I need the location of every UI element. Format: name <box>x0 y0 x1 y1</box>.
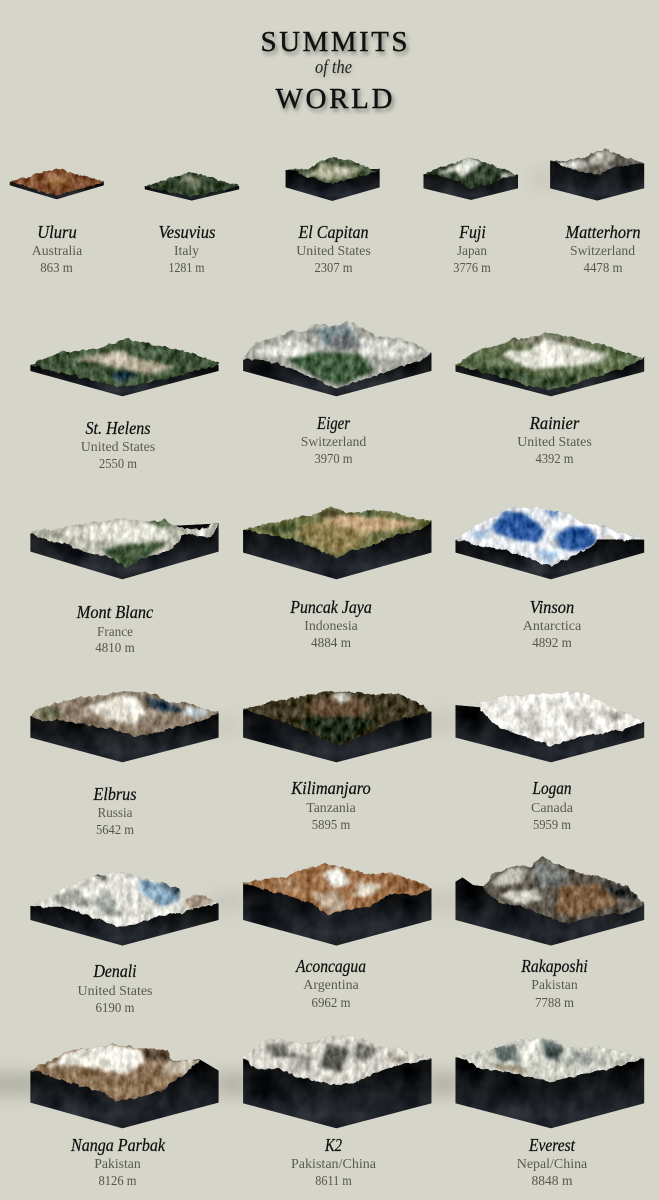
title line: of the: of the <box>315 57 352 78</box>
country: Russia <box>98 805 132 820</box>
height: 1281 m <box>168 260 205 275</box>
mountain: Vesuvius <box>145 172 239 275</box>
name: St. Helens <box>86 418 150 438</box>
terrain block <box>455 507 644 579</box>
height: 8126 m <box>98 1173 137 1188</box>
name: K2 <box>324 1135 342 1155</box>
country: United States <box>81 439 155 454</box>
terrain block <box>145 172 239 201</box>
name: Denali <box>93 961 136 981</box>
terrain block <box>30 338 219 396</box>
mountain: Denali <box>30 873 219 1015</box>
country: Tanzania <box>306 800 356 815</box>
terrain block <box>243 692 431 762</box>
height: 5642 m <box>96 822 134 837</box>
terrain block <box>243 864 431 946</box>
mountain: Vinson <box>455 507 644 650</box>
cast shadows <box>0 173 556 1094</box>
country: Australia <box>32 243 82 258</box>
height: 5895 m <box>312 817 351 832</box>
country: United States <box>517 434 592 449</box>
terrain block <box>10 168 104 199</box>
height: 8611 m <box>315 1173 352 1188</box>
height: 3970 m <box>314 451 353 466</box>
country: Italy <box>174 243 199 258</box>
country: Pakistan <box>94 1156 141 1171</box>
name: Fuji <box>458 222 486 242</box>
height: 4892 m <box>532 635 572 650</box>
country: Pakistan <box>531 977 578 992</box>
terrain block <box>243 507 431 579</box>
height: 7788 m <box>535 995 574 1010</box>
country: Japan <box>457 243 487 258</box>
country: Canada <box>531 800 573 815</box>
terrain block <box>30 692 219 762</box>
name: Aconcagua <box>295 956 366 976</box>
name: Matterhorn <box>565 222 640 242</box>
mountain: K2 <box>243 1037 431 1188</box>
height: 5959 m <box>533 817 571 832</box>
country: France <box>97 624 133 639</box>
terrain block <box>30 1044 219 1128</box>
country: Nepal/China <box>517 1156 587 1171</box>
mountain: Matterhorn <box>550 149 644 275</box>
title line: WORLD: WORLD <box>276 83 392 115</box>
country: Pakistan/China <box>291 1156 376 1171</box>
mountain: Elbrus <box>30 692 219 837</box>
country: Indonesia <box>304 618 358 633</box>
name: Puncak Jaya <box>289 597 372 617</box>
name: Vesuvius <box>158 222 216 242</box>
country: Switzerland <box>301 434 367 449</box>
height: 863 m <box>40 260 73 275</box>
mountain: Fuji <box>423 158 518 275</box>
terrain block <box>455 1038 644 1128</box>
terrain block <box>455 333 644 396</box>
height: 4478 m <box>584 260 623 275</box>
name: El Capitan <box>298 222 368 242</box>
terrain block <box>243 322 431 396</box>
name: Mont Blanc <box>76 602 153 622</box>
height: 6190 m <box>96 1000 135 1015</box>
terrain block <box>455 857 644 946</box>
terrain block <box>550 149 644 201</box>
title <box>260 26 408 115</box>
mountain: Everest <box>455 1038 644 1188</box>
name: Nanga Parbak <box>70 1135 166 1155</box>
name: Rainier <box>529 413 580 433</box>
mountain: Eiger <box>243 322 431 466</box>
country: Argentina <box>303 977 359 992</box>
terrain block <box>455 692 644 762</box>
mountain: Uluru <box>10 168 104 275</box>
mountain: Rainier <box>455 333 644 466</box>
mountain: Aconcagua <box>243 864 431 1010</box>
height: 3776 m <box>453 260 491 275</box>
name: Logan <box>532 778 572 798</box>
height: 6962 m <box>312 995 351 1010</box>
title line: SUMMITS: SUMMITS <box>260 26 408 58</box>
name: Kilimanjaro <box>290 778 371 798</box>
name: Everest <box>528 1135 576 1155</box>
country: United States <box>78 983 152 998</box>
name: Elbrus <box>93 784 136 804</box>
terrain block <box>30 873 219 946</box>
mountain: Logan <box>455 692 644 832</box>
height: 4392 m <box>536 451 574 466</box>
country: Antarctica <box>523 618 581 633</box>
height: 4810 m <box>95 640 135 655</box>
height: 2550 m <box>99 456 137 471</box>
mountain: Nanga Parbak <box>30 1044 219 1188</box>
name: Rakaposhi <box>520 956 588 976</box>
country: United States <box>296 243 371 258</box>
terrain block <box>243 1037 431 1128</box>
name: Uluru <box>37 222 77 242</box>
terrain block <box>286 157 380 201</box>
country: Switzerland <box>570 243 635 258</box>
mountain: Puncak Jaya <box>243 507 431 650</box>
mountain: El Capitan <box>286 157 380 275</box>
mountain: St. Helens <box>30 338 219 471</box>
mountain: Mont Blanc <box>30 518 219 655</box>
height: 2307 m <box>314 260 353 275</box>
terrain block <box>423 158 518 200</box>
height: 8848 m <box>532 1173 573 1188</box>
height: 4884 m <box>311 635 351 650</box>
name: Eiger <box>316 413 351 433</box>
terrain block <box>30 518 219 579</box>
mountain: Kilimanjaro <box>243 692 431 832</box>
name: Vinson <box>530 597 574 617</box>
mountain: Rakaposhi <box>455 857 644 1010</box>
